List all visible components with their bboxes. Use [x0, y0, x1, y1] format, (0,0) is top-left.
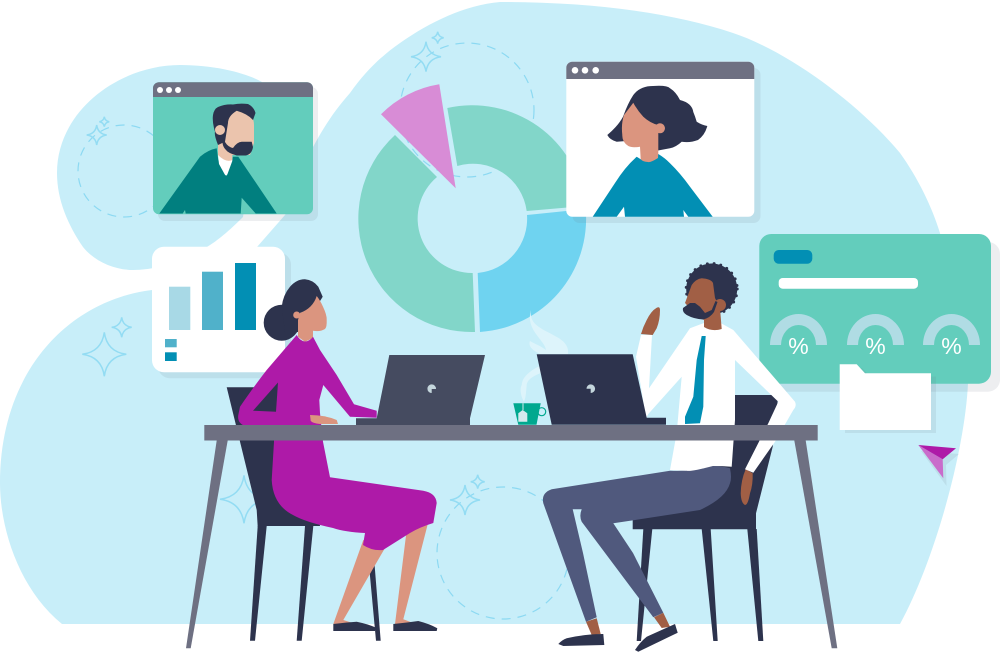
pill label: [774, 250, 812, 264]
segment: large green: [358, 135, 475, 332]
segment: pink exploded slice: [381, 84, 456, 188]
shoes: [333, 621, 437, 631]
bars: [169, 263, 256, 330]
hair: [686, 264, 737, 314]
dashboard card: [759, 234, 1000, 392]
shoes: [558, 624, 678, 652]
hand: [310, 415, 338, 424]
segment: blue: [478, 209, 586, 332]
laptop logo: [586, 384, 595, 393]
man: [543, 264, 796, 652]
folder icon: [840, 364, 936, 433]
woman chair: [227, 387, 381, 641]
raised hand: [641, 307, 660, 335]
tie: [685, 336, 706, 424]
legs: [333, 522, 428, 624]
lower hand: [741, 469, 753, 505]
trousers: [543, 466, 731, 622]
arm gap: [253, 382, 278, 412]
video window: woman: [566, 62, 760, 223]
donut chart: [358, 84, 586, 332]
table: [186, 425, 837, 648]
woman avatar: [593, 86, 713, 217]
woman: [238, 279, 437, 631]
steam: [521, 310, 568, 402]
white bar: [779, 278, 918, 289]
paper plane icon: [918, 445, 959, 486]
bun and hair: [264, 279, 323, 341]
ear: [714, 299, 726, 311]
legend: [165, 339, 177, 361]
left laptop: [356, 355, 485, 425]
man chair: [633, 395, 778, 641]
face: [298, 296, 327, 342]
gauge 3: [923, 314, 980, 359]
white shirt: [636, 322, 796, 473]
beard: [683, 301, 718, 320]
video window: man: [153, 82, 318, 221]
gauge 2: [847, 314, 904, 359]
ear: [293, 312, 300, 318]
tea cup: [513, 403, 546, 425]
neck and face: [685, 278, 722, 330]
gauge 3: %: [941, 333, 962, 359]
sparkles: [82, 32, 485, 523]
right laptop: [537, 354, 666, 425]
magenta dress: [238, 335, 437, 550]
gauge 1: %: [788, 333, 809, 359]
laptop logo: [427, 384, 436, 393]
gauge 2: %: [865, 333, 886, 359]
ankles: [586, 613, 670, 635]
segment: upper green: [447, 105, 585, 211]
bar chart card: [152, 247, 291, 378]
gauge 1: [770, 314, 827, 359]
dashed circles: [78, 43, 569, 619]
man avatar: [159, 104, 277, 214]
